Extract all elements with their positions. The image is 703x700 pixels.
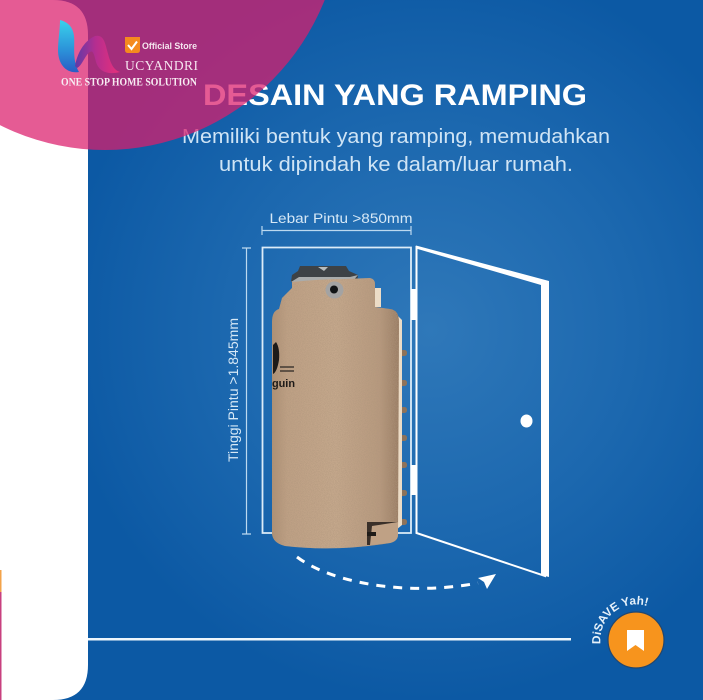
title: DESAIN YANG RAMPING [203, 79, 587, 112]
subtitle [182, 126, 610, 176]
logo mark [58, 20, 120, 73]
store name: UCYANDRI [125, 58, 198, 73]
orange button [608, 612, 664, 668]
store tagline: ONE STOP HOME SOLUTION [61, 76, 198, 88]
left edge colour strip [0, 570, 2, 700]
door knob [520, 414, 532, 428]
door hinges [411, 289, 416, 495]
tank logo: guin [272, 378, 295, 390]
width dimension [262, 211, 412, 235]
save caption: DiSAVE Yah! [592, 596, 648, 644]
bottom line [88, 638, 571, 640]
tank body [272, 278, 399, 548]
tank logo [272, 342, 295, 390]
width dimension: Lebar Pintu >850mm [270, 211, 412, 226]
pink overlay circle [0, 0, 342, 150]
subtitle: untuk dipindah ke dalam/luar rumah. [219, 154, 573, 176]
height dimension: Tinggi Pintu >1.845mm [226, 318, 241, 462]
tank outlet [326, 282, 344, 298]
logo [58, 20, 198, 88]
tank bottom notch [367, 522, 398, 545]
official store badge [125, 37, 197, 53]
height dimension [226, 248, 251, 534]
official store badge: Official Store [142, 41, 197, 52]
tank ribs [398, 350, 407, 525]
dashed swing arrow [297, 557, 496, 589]
bookmark icon [627, 630, 644, 651]
open door [411, 246, 549, 577]
white side panel [0, 0, 88, 700]
tank lid [291, 266, 358, 283]
door frame [262, 248, 411, 533]
save badge [592, 596, 665, 669]
water tank [272, 266, 407, 548]
tank highlight [374, 288, 402, 530]
subtitle: Memiliki bentuk yang ramping, memudahkan [182, 126, 610, 148]
